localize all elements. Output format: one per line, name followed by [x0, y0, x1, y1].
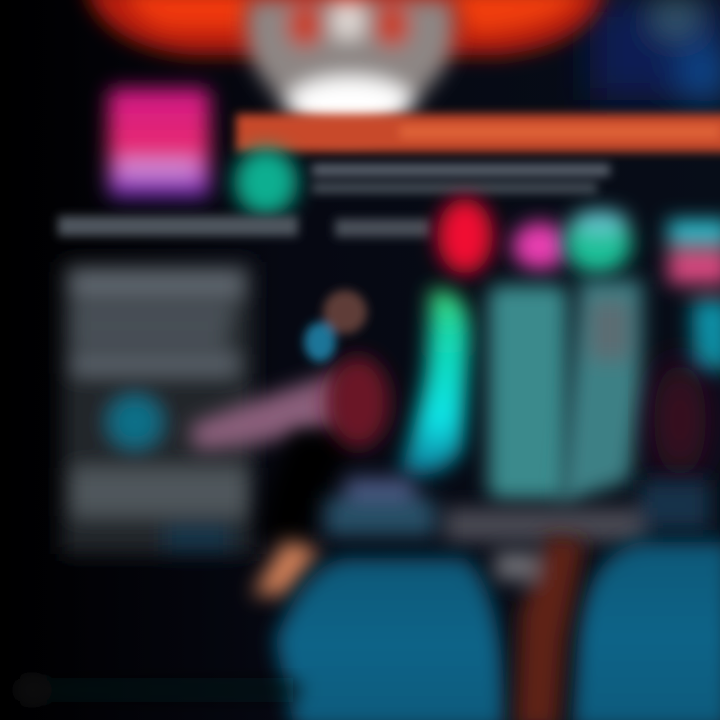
teal column 1 — [488, 285, 568, 500]
arm — [190, 372, 345, 450]
green teal marker — [564, 210, 632, 274]
legs — [260, 430, 355, 550]
bright cyan column — [400, 290, 470, 476]
top right starry blue area — [590, 0, 720, 105]
left text panel — [62, 262, 254, 554]
person figure — [190, 290, 390, 595]
section title line — [58, 216, 430, 237]
torso — [326, 356, 390, 448]
panel text rows — [72, 272, 247, 552]
head — [304, 290, 367, 362]
pink marker — [512, 222, 568, 270]
red circle marker — [437, 198, 493, 274]
lower right teal shape — [572, 542, 720, 720]
lower left teal shape — [275, 558, 505, 720]
pink purple icon tile — [108, 88, 210, 198]
right dark red shape — [654, 360, 706, 480]
header: red banner arc — [85, 0, 605, 55]
center brown red column — [495, 535, 585, 720]
right edge color tile — [668, 220, 720, 370]
subtitle text — [312, 164, 610, 193]
teal circle icon — [234, 148, 298, 216]
footer caption — [20, 678, 300, 702]
teal column 2 — [560, 280, 642, 505]
orange ribbon heading — [236, 114, 720, 152]
table and desk — [325, 478, 710, 542]
foot — [252, 540, 320, 595]
header: crown emblem — [247, 0, 453, 135]
